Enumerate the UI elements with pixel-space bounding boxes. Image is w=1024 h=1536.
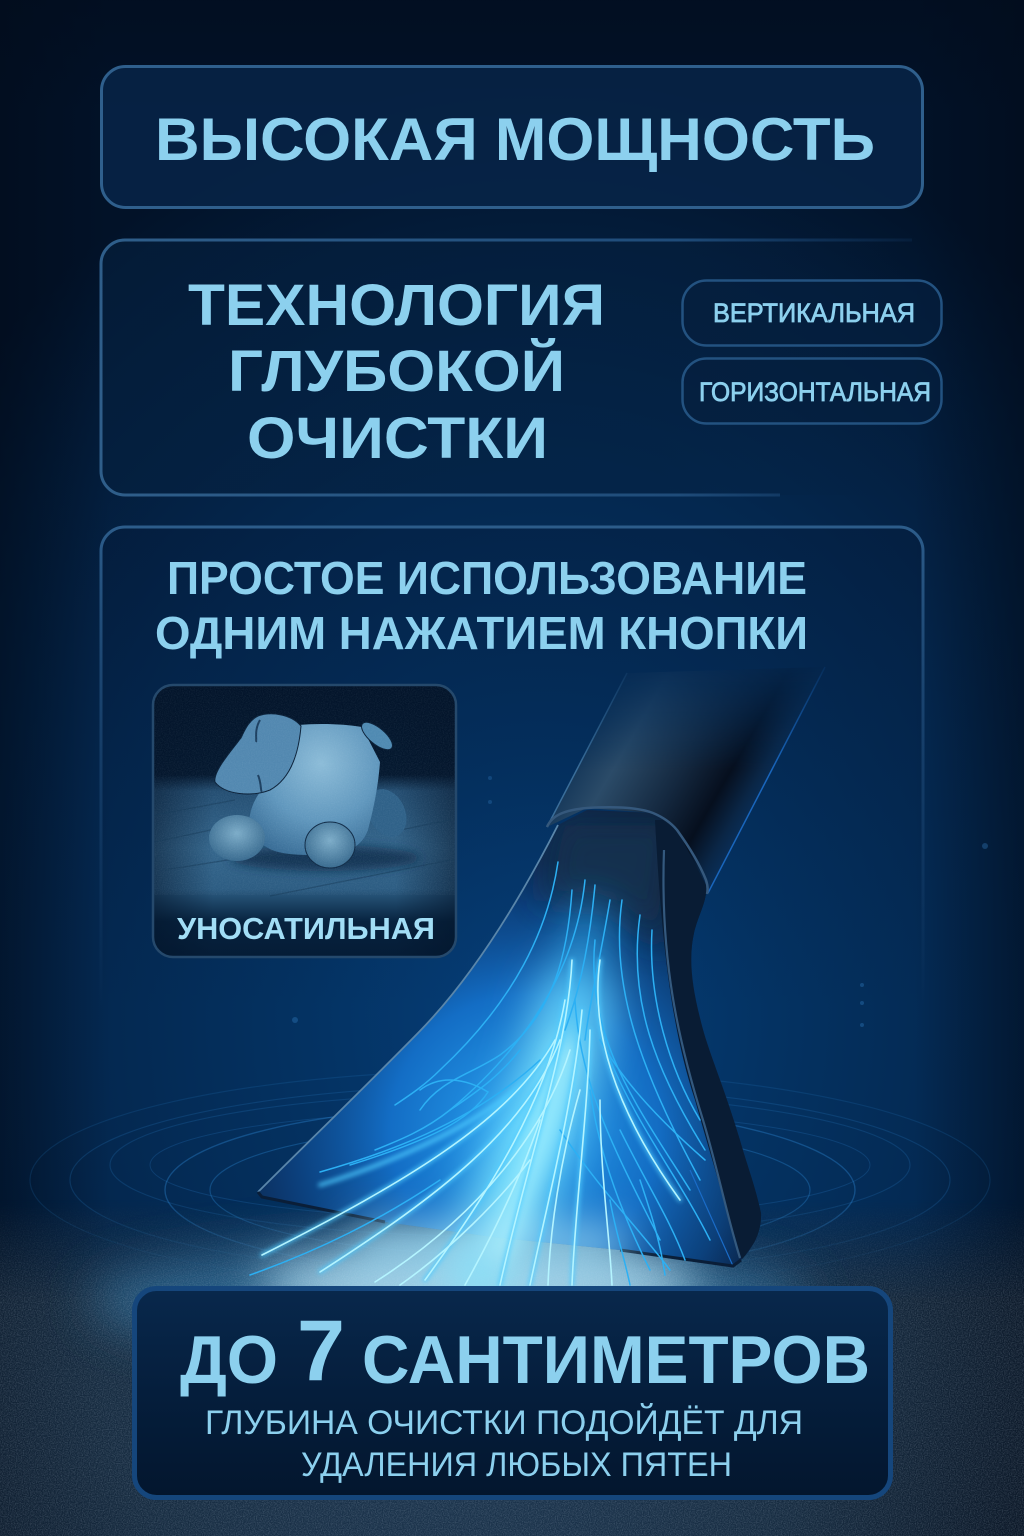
caption: cleaning depth: ГЛУБИНА ОЧИСТКИ ПОДОЙДЁТ ДЛЯ: [205, 1404, 803, 1442]
panel: deep cleaning technology: [101, 240, 942, 495]
big figure: up to 7 centimeters: САНТИМЕТРОВ: [362, 1322, 870, 1398]
mid lines: [250, 862, 710, 1285]
plush toy: [153, 685, 456, 957]
pill: horizontal: ГОРИЗОНТАЛЬНАЯ: [699, 377, 931, 407]
big figure: up to 7 centimeters: 7: [297, 1303, 345, 1399]
inner core: [500, 1050, 568, 1250]
caption: cleaning depth: [205, 1404, 803, 1484]
energy rings on floor: [30, 1070, 990, 1290]
label: plush caption: УНОСАТИЛЬНАЯ: [177, 911, 435, 946]
soft lines: [262, 960, 680, 1285]
bright lines: [262, 960, 680, 1285]
heading: deep cleaning technology: ГЛУБОКОЙ: [228, 339, 565, 404]
panel: cleaning depth: [134, 1288, 890, 1498]
airflow lines: [250, 862, 710, 1285]
heading: easy use: ОДНИМ НАЖАТИЕМ КНОПКИ: [155, 607, 808, 659]
heading: deep cleaning technology: ОЧИСТКИ: [247, 406, 548, 471]
pill: vertical: ВЕРТИКАЛЬНАЯ: [713, 298, 915, 328]
heading: easy use: [155, 552, 808, 659]
heading: high power: ВЫСОКАЯ МОЩНОСТЬ: [155, 106, 875, 173]
nozzle: [250, 667, 825, 1290]
panel: easy use: [101, 527, 923, 1010]
core glow: [370, 920, 610, 1265]
panel: plush toy inset: [153, 685, 456, 957]
pill: vertical: [682, 280, 942, 346]
nozzle tube: [547, 667, 825, 893]
nozzle collar: [547, 807, 708, 894]
carpet floor: [0, 1190, 1024, 1536]
pill: horizontal: [682, 358, 942, 424]
heading: deep cleaning technology: ТЕХНОЛОГИЯ: [188, 273, 605, 338]
caption: cleaning depth: УДАЛЕНИЯ ЛЮБЫХ ПЯТЕН: [301, 1446, 732, 1484]
big figure: up to 7 centimeters: [180, 1303, 870, 1399]
heading: deep cleaning technology: [188, 273, 605, 471]
nozzle head: [250, 810, 770, 1290]
heading: easy use: ПРОСТОЕ ИСПОЛЬЗОВАНИЕ: [167, 552, 807, 604]
panel: high power: [102, 66, 922, 208]
big figure: up to 7 centimeters: ДО: [180, 1322, 278, 1398]
